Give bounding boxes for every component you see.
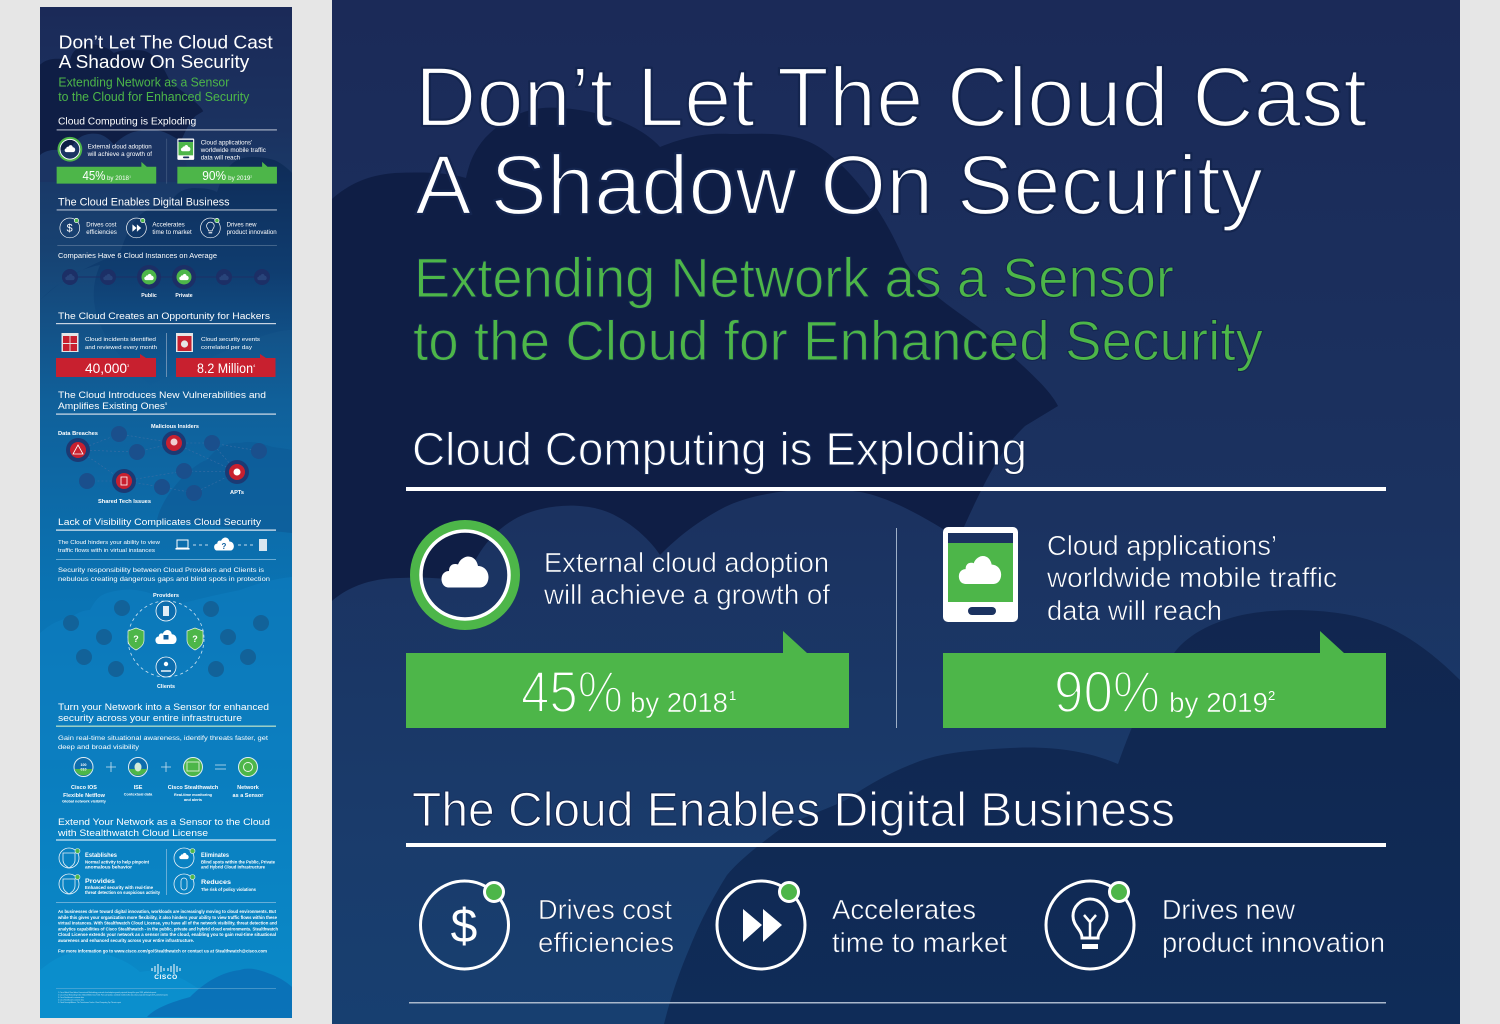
thumbnail: footnotes (56, 988, 276, 1004)
thumbnail: hackers section (56, 310, 276, 377)
thumbnail: network as a sensor section: Contextual data (124, 792, 153, 796)
text: mobile traffic: worldwide mobile traffic (1046, 562, 1337, 593)
text: accelerates time to market: time to market (832, 927, 1007, 958)
thumbnail: vulnerabilities section: The Cloud Introduces New Vulnerabilities and (58, 389, 266, 400)
heading: digital business: The Cloud Enables Digital Business (412, 784, 1175, 837)
thumbnail: hackers section: The Cloud Creates an Opportunity for Hackers (58, 310, 270, 321)
thumbnail: network as a sensor section: Gain real-time situational awareness, identify threats faster, get (58, 735, 268, 742)
thumbnail: stealthwatch cloud license section: Eliminates (201, 852, 229, 859)
callout: 45 percent by 2018: 45% (521, 660, 623, 725)
thumbnail: network as a sensor section: Flexible Netflow (63, 793, 106, 799)
panel: full poster thumbnail (40, 7, 292, 1018)
thumbnail: network as a sensor section: and alerts (184, 798, 202, 802)
thumbnail: top sections (scaled copy of enlarged detail): data will reach (201, 154, 241, 161)
thumbnail: cisco logo: CISCO (154, 974, 178, 981)
thumbnail: closing paragraph: As businesses drive toward digital innovation, workloads are increasingly moving to cloud environments. But (58, 909, 276, 914)
thumbnail: lack of visibility section: ? (192, 634, 198, 644)
thumbnail: vulnerabilities section: Shared Tech Issues (98, 499, 151, 505)
text: mobile traffic: Cloud applications’ (1047, 530, 1277, 561)
thumbnail: hackers section: 8.2 Million (197, 360, 253, 376)
thumbnail: top sections (scaled copy of enlarged detail): 45% (82, 168, 106, 183)
panel: enlarged detail (332, 0, 1460, 1024)
text: external cloud adoption: will achieve a growth of (543, 579, 830, 610)
thumbnail: lack of visibility section: Clients (157, 684, 175, 690)
thumbnail: network as a sensor section: deep and broad visibility (58, 744, 140, 751)
thumbnail: footnotes: 1. Cisco Global Cloud Index: Forecast and Methodology, external cloud adoption growth projected through the year 2018, published reports (58, 991, 156, 994)
thumbnail: stealthwatch cloud license section: and Hybrid Cloud Infrastructure (201, 864, 265, 870)
heading: digital business (406, 790, 1386, 847)
thumbnail: lack of visibility section: Lack of Visibility Complicates Cloud Security (58, 516, 261, 527)
thumbnail: lack of visibility section (56, 516, 276, 690)
thumbnail: network as a sensor section: Turn your Network into a Sensor for enhanced (58, 701, 269, 712)
thumbnail: hackers section: Cloud security events (201, 337, 260, 343)
thumbnail: closing paragraph: analytics capabilities of Cisco Stealthwatch - in the public, private and hybrid cloud environments. Stealthwatch (58, 926, 278, 932)
text: external cloud adoption (543, 547, 830, 610)
thumbnail: lack of visibility section: nebulous creating dangerous gaps and blind spots in protection (58, 576, 270, 583)
thumbnail: top sections (scaled copy of enlarged detail): 2 (250, 174, 252, 178)
thumbnail: lack of visibility section: traffic flows with in virtual instances (58, 548, 155, 554)
text: drives cost efficiencies (539, 899, 673, 952)
thumbnail: network as a sensor section: 100 (80, 763, 86, 767)
thumbnail: hackers section: 3 (127, 363, 130, 368)
thumbnail: stealthwatch cloud license section: Blind spots within the Public, Private (201, 860, 275, 864)
thumbnail: top sections (scaled copy of enlarged detail): product innovation (227, 229, 277, 236)
thumbnail: network as a sensor section: ISE (134, 785, 143, 791)
thumbnail: top sections (scaled copy of enlarged detail): to the Cloud for Enhanced Security (58, 90, 250, 104)
thumbnail: stealthwatch cloud license section: Establishes (85, 852, 117, 859)
thumbnail: stealthwatch cloud license section: Reduces (201, 879, 232, 886)
thumbnail: cloud instances section (58, 253, 270, 299)
thumbnail: cisco logo (152, 964, 180, 981)
thumbnail: top sections (scaled copy of enlarged detail): Cloud applications’ (201, 140, 252, 147)
thumbnail: network as a sensor section: as a Sensor (233, 793, 264, 799)
thumbnail: top sections (scaled copy of enlarged detail): Accelerates (152, 222, 185, 229)
thumbnail: stealthwatch cloud license section: Provides (85, 878, 115, 885)
thumbnail: top sections (scaled copy of enlarged detail): efficiencies (86, 229, 117, 236)
thumbnail: top sections (scaled copy of enlarged detail): 90% (202, 168, 227, 183)
icon: light bulb (1046, 881, 1134, 969)
thumbnail: vulnerabilities section: Malicious Insiders (151, 424, 199, 430)
thumbnail: stealthwatch cloud license section: Extend Your Network as a Sensor to the Cloud (58, 816, 270, 827)
icon: fast forward (717, 881, 805, 969)
thumbnail: network as a sensor section: Cisco Stealthwatch (168, 785, 219, 791)
thumbnail: vulnerabilities section: APTs (230, 490, 244, 496)
thumbnail: top sections (scaled copy of enlarged detail) (57, 32, 277, 246)
text: drives cost efficiencies: efficiencies (538, 927, 674, 958)
thumbnail: top sections (scaled copy of enlarged detail): time to market (152, 229, 192, 236)
background with cloud shapes (332, 0, 1460, 1024)
thumbnail: stealthwatch cloud license section: Normal activity to help pinpoint (85, 860, 149, 864)
thumbnail: closing paragraph: awareness and enhanced security across your entire infrastructure. (58, 938, 194, 943)
thumbnail: stealthwatch cloud license section (56, 816, 276, 903)
thumbnail: footnotes: 5. Cloud Security Alliance, The Treacherous Twelve: Cloud Computing Top Threats report (58, 1001, 122, 1004)
heading: cloud computing: Cloud Computing is Exploding (412, 423, 1027, 475)
title (415, 50, 1367, 232)
thumbnail: stealthwatch cloud license section: Enhanced security with real-time (85, 885, 153, 890)
thumbnail: network as a sensor section: Network (237, 785, 260, 791)
thumbnail: closing paragraph: For more information go to www.cisco.com/go/Stealthwatch or contact us at Stealthwatch@cisco.com (58, 948, 267, 954)
thumbnail: network as a sensor section: Cisco IOS (71, 785, 97, 791)
thumbnail: lack of visibility section: Providers (153, 593, 179, 599)
thumbnail: network as a sensor section: security across your entire infrastructure (58, 712, 242, 723)
thumbnail: top sections (scaled copy of enlarged detail): worldwide mobile traffic (200, 147, 266, 154)
thumbnail: vulnerabilities section: Amplifies Existing Ones (58, 400, 165, 411)
thumbnail: network as a sensor section (56, 701, 276, 804)
thumbnail: lack of visibility section: Security responsibility between Cloud Providers and Clients is (58, 567, 265, 574)
thumbnail: top sections (scaled copy of enlarged detail): External cloud adoption (88, 144, 152, 151)
thumbnail: footnotes: 2. Cisco Visual Networking Index: Global Mobile Data Traffic Forecast Update, worldwide mobile traffic data share projected through 2019, published reports (58, 994, 168, 996)
thumbnail: vulnerabilities section: Data Breaches (58, 431, 98, 437)
thumbnail: network as a sensor section: 010 (80, 768, 86, 772)
thumbnail: hackers section: correlated per day (201, 345, 252, 351)
thumbnail: top sections (scaled copy of enlarged detail): Drives cost (86, 222, 117, 229)
text: drives new product innovation (1162, 894, 1385, 958)
thumbnail: lack of visibility section: ? (222, 542, 227, 551)
thumbnail: footnotes: 4. Cisco Stealthwatch customer data (58, 998, 84, 1002)
thumbnail: closing paragraph: Cloud License extends your network as a sensor into the cloud, enabling you to gain real-time situational (58, 932, 276, 937)
thumbnail: top sections (scaled copy of enlarged detail): Cloud Computing is Exploding (58, 117, 196, 128)
thumbnail: top sections (scaled copy of enlarged detail): The Cloud Enables Digital Business (58, 197, 230, 209)
thumbnail: top sections (scaled copy of enlarged detail): Drives new (227, 222, 257, 229)
callout: 90 percent by 2019: 90% (1054, 660, 1160, 725)
thumbnail: cloud instances section: Private (175, 293, 193, 299)
divider (896, 528, 897, 728)
thumbnail: top sections (scaled copy of enlarged detail): A Shadow On Security (59, 52, 250, 73)
thumbnail: lack of visibility section: ? (133, 634, 139, 644)
icon: dollar: $ (451, 900, 477, 953)
thumbnail: top sections (scaled copy of enlarged detail): by 2018 (107, 175, 130, 182)
thumbnail: top sections (scaled copy of enlarged detail): Extending Network as a Sensor (58, 76, 229, 90)
callout: 90 percent by 2019: 2 (1268, 688, 1275, 703)
text: drives cost efficiencies: Drives cost (538, 894, 672, 925)
text: external cloud adoption: External cloud adoption (544, 547, 829, 578)
icon: dollar (420, 881, 508, 969)
thumbnail: top sections (scaled copy of enlarged detail): by 2019 (228, 175, 251, 182)
text: accelerates time to market: Accelerates (832, 894, 976, 925)
thumbnail: closing paragraph: virtual instances. With Stealthwatch Cloud License, you have all of the network visibility, threat detection and (58, 920, 277, 926)
text: drives new product innovation: Drives new (1162, 894, 1296, 925)
thumbnail: hackers section: Cloud incidents identified (85, 337, 156, 343)
thumbnail: top sections (scaled copy of enlarged detail): will achieve a growth of (87, 151, 152, 158)
icon: cloud in green ring (415, 525, 515, 625)
thumbnail: vulnerabilities section: 5 (165, 401, 168, 406)
thumbnail: network as a sensor section: Real-time monitoring (174, 793, 213, 797)
text: accelerates time to market (832, 899, 1007, 952)
callout: 45 percent by 2018 (406, 631, 849, 728)
subtitle: to the Cloud for Enhanced Security (413, 309, 1263, 372)
thumbnail: hackers section: and reviewed every month (85, 345, 157, 351)
text: drives new product innovation: product innovation (1162, 927, 1385, 958)
text: mobile traffic: data will reach (1047, 595, 1222, 626)
callout: 45 percent by 2018: by 2018 (630, 687, 728, 718)
title: Don’t Let The Cloud Cast (415, 50, 1367, 144)
thumbnail: stealthwatch cloud license section: The risk of policy violations (201, 887, 256, 892)
thumbnail: lack of visibility section: The Cloud hinders your ability to view (58, 540, 160, 546)
callout: 90 percent by 2019: by 2019 (1169, 687, 1268, 718)
icon: tablet with cloud (943, 527, 1018, 622)
thumbnail: stealthwatch cloud license section: anomalous behavior (85, 864, 132, 870)
thumbnail: hackers section: 4 (253, 363, 256, 368)
thumbnail: top sections (scaled copy of enlarged detail): Don’t Let The Cloud Cast (59, 32, 273, 53)
thumbnail: hackers section: 40,000 (85, 360, 127, 376)
subtitle (413, 246, 1263, 372)
thumbnail: stealthwatch cloud license section: with Stealthwatch Cloud License (57, 827, 208, 838)
thumbnail: network as a sensor section: Global network visibility (62, 800, 107, 804)
thumbnail: top sections (scaled copy of enlarged detail): 1 (129, 174, 131, 178)
thumbnail: cloud instances section: Companies Have 6 Cloud Instances on Average (58, 253, 217, 260)
thumbnail: closing paragraph: while this gives your organization more flexibility, it also hinders your ability to view traffic flows within these (57, 915, 277, 920)
heading: cloud computing (406, 431, 1386, 491)
thumbnail: vulnerabilities section (56, 389, 276, 505)
text: mobile traffic (1047, 535, 1336, 620)
callout: 90 percent by 2019 (943, 631, 1386, 728)
title: A Shadow On Security (415, 138, 1263, 232)
thumbnail: cloud instances section: Public (141, 293, 157, 299)
thumbnail background with clouds (40, 7, 292, 1018)
callout: 45 percent by 2018: 1 (729, 688, 736, 703)
thumbnail: top sections (scaled copy of enlarged detail): $ (67, 223, 73, 235)
thumbnail: closing paragraph (57, 909, 278, 954)
subtitle: Extending Network as a Sensor (414, 246, 1174, 309)
thumbnail: footnotes: 3. Cisco Stealthwatch customer data (58, 996, 84, 999)
thumbnail: stealthwatch cloud license section: threat detection on suspicious activity (85, 890, 160, 895)
